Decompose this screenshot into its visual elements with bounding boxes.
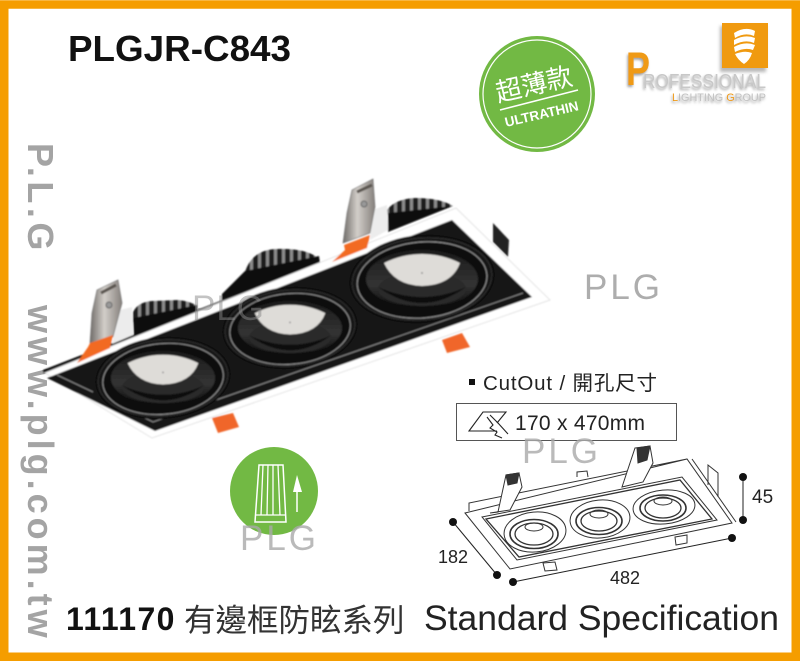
side text: website: www.plg.com.tw <box>20 304 61 642</box>
line drawing: fixture dimensions <box>465 446 736 571</box>
series caption: 有邊框防眩系列 <box>184 602 405 638</box>
clips and tabs <box>490 446 718 571</box>
dimension: 182 <box>438 518 501 579</box>
cutout box: 170 x 470mm <box>515 412 645 435</box>
dimension: 182: 182 <box>438 547 468 567</box>
logo icon <box>720 23 768 72</box>
title: PLGJR-C843 <box>68 28 291 69</box>
cutout box <box>456 404 676 440</box>
series caption: Standard Specification <box>424 599 779 638</box>
logo: professional lighting group <box>626 23 768 104</box>
badge: ultrathin: ULTRATHIN <box>503 98 580 130</box>
series caption <box>66 599 779 638</box>
badge: ultrathin: 超薄款 <box>493 61 575 108</box>
watermarks: PLG <box>192 289 265 328</box>
logo: professional lighting group: ROFESSIONAL <box>643 71 766 93</box>
lamps <box>502 487 696 555</box>
watermarks: PLG <box>584 268 663 307</box>
badge: ultrathin <box>479 36 595 152</box>
cutout heading: CutOut / 開孔尺寸 <box>483 372 657 395</box>
logo: professional lighting group: LIGHTING GROUP <box>672 92 766 104</box>
dimension: 45: 45 <box>752 487 773 508</box>
white frame <box>43 262 320 374</box>
black plate <box>47 220 532 431</box>
lamps <box>92 331 234 425</box>
dimension: 482 <box>509 534 736 588</box>
watermark: PLG <box>240 519 319 558</box>
back heat sinks <box>133 198 453 338</box>
series caption: 111170 <box>66 601 176 637</box>
logo text: P <box>626 42 650 95</box>
icon: lumen / height <box>230 447 318 535</box>
spring clip right <box>332 179 388 262</box>
side text: P.L.G: P.L.G <box>20 143 61 255</box>
watermarks <box>192 268 663 328</box>
dimension: 45 <box>739 473 773 524</box>
outer frame <box>465 459 732 569</box>
orange tabs <box>212 413 239 433</box>
icon: cut hole <box>469 412 508 438</box>
watermark: PLG <box>522 432 601 471</box>
spring clip left <box>77 280 133 363</box>
rear square clip <box>493 223 509 257</box>
dimension: 482: 482 <box>610 568 640 588</box>
product photo: triple downlight <box>43 179 550 438</box>
